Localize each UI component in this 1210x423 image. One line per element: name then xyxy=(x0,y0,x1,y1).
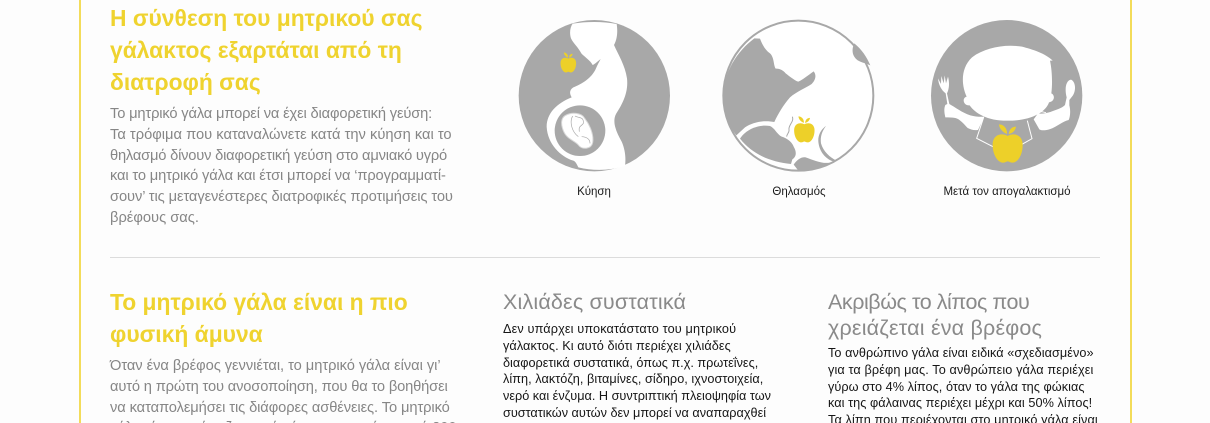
text block: taste of breast milk xyxy=(110,106,453,226)
baby silhouette xyxy=(740,126,796,164)
text block: ingredients: συστατικών αυτών δεν μπορεί να αναπαραχθεί xyxy=(503,406,766,420)
breast curve xyxy=(818,126,837,162)
text block: fat content: γύρω στο 4% λίπος, όταν το γάλα της φώκιας xyxy=(828,380,1085,394)
text block: taste of breast milk: και το μητρικό γάλα και έτσι μπορεί να ‘προγραμματί- xyxy=(110,168,446,184)
left yellow frame border xyxy=(79,0,81,423)
text block: ingredients: νερό και ένζυμα. Η συντριπτική πλειοψηφία των xyxy=(503,389,771,403)
heading: natural defence xyxy=(110,289,408,347)
subheading: exactly the fat a baby needs: χρειάζεται ένα βρέφος xyxy=(828,316,1042,340)
text block: first vaccination: αυτό η πρώτη του ανοσοποίηση, που θα το βοηθήσει xyxy=(110,379,448,395)
text block: first vaccination: να καταπολεμήσει τις διάφορες ασθένειες. Το μητρικό xyxy=(110,400,450,416)
text block: fat content: για τα βρέφη μας. Το ανθρώπειο γάλα περιέχει xyxy=(828,363,1093,377)
right yellow frame border xyxy=(1130,0,1132,423)
text block: ingredients xyxy=(503,322,771,420)
label: after weaning: Μετά τον απογαλακτισμό xyxy=(943,186,1071,198)
text block: taste of breast milk: Τα τρόφιμα που καταναλώνετε κατά την κύηση και το xyxy=(110,127,452,143)
subheading: exactly the fat a baby needs xyxy=(828,290,1042,340)
apple xyxy=(993,124,1023,163)
apple xyxy=(794,116,815,142)
mother silhouette xyxy=(723,38,815,135)
heading: diet and milk composition: διατροφή σας xyxy=(110,69,261,95)
apple xyxy=(561,53,576,72)
fork and left arm xyxy=(938,75,984,130)
text block: taste of breast milk: βρέφους σας. xyxy=(110,210,199,226)
heading: diet and milk composition: Η σύνθεση του μητρικού σας xyxy=(110,5,422,31)
label: pregnancy: Κύηση xyxy=(577,186,611,198)
heading: natural defence: φυσική άμυνα xyxy=(110,321,263,347)
icon: breastfeeding xyxy=(722,20,874,172)
text block: taste of breast milk: Το μητρικό γάλα μπορεί να έχει διαφορετική γεύση: xyxy=(110,106,432,122)
text block: ingredients: γάλακτος. Κι αυτό διότι περιέχει χιλιάδες xyxy=(503,339,731,353)
heading: diet and milk composition: γάλακτος εξαρτάται από τη xyxy=(110,37,402,63)
text block: fat content: και της φάλαινας περιέχει μέχρι και 50% λίπος! xyxy=(828,396,1092,410)
text block: taste of breast milk: σουν’ τις μεταγενέστερες διατροφικές προτιμήσεις του xyxy=(110,189,453,205)
fetus xyxy=(562,113,593,148)
collar xyxy=(1035,112,1046,113)
text block: first vaccination: Όταν ένα βρέφος γεννιέται, το μητρικό γάλα είναι γι’ xyxy=(110,358,441,374)
text block: ingredients: διαφορετικά συστατικά, όπως π.χ. πρωτεΐνες, xyxy=(503,356,758,370)
spoon and right arm xyxy=(1034,80,1075,130)
text block: taste of breast milk: θηλασμό δίνουν διαφορετική γεύση στο αμνιακό υγρό xyxy=(110,148,447,164)
text block: fat content: Το ανθρώπινο γάλα είναι ειδικά «σχεδιασμένο» xyxy=(828,346,1094,360)
icon: after weaning xyxy=(931,20,1082,172)
divider xyxy=(110,257,1100,258)
icon: pregnancy xyxy=(518,20,670,172)
text block: ingredients: Δεν υπάρχει υποκατάστατο του μητρικού xyxy=(503,322,736,336)
text block: fat content xyxy=(828,346,1098,423)
womb xyxy=(555,105,605,156)
text block: ingredients: λίπη, λακτόζη, βιταμίνες, σίδηρο, ιχνοστοιχεία, xyxy=(503,372,763,386)
shirt outline xyxy=(977,117,1032,147)
heading: natural defence: Το μητρικό γάλα είναι η πιο xyxy=(110,289,408,315)
subheading: exactly the fat a baby needs: Ακριβώς το λίπος που xyxy=(828,290,1029,314)
steam xyxy=(787,117,793,137)
label: breastfeeding: Θηλασμός xyxy=(772,186,826,198)
heading: diet and milk composition xyxy=(110,5,422,95)
child head xyxy=(963,46,1054,121)
subheading: thousands of ingredients: Χιλιάδες συστατικά xyxy=(503,290,686,314)
text block: first vaccination xyxy=(110,358,456,423)
